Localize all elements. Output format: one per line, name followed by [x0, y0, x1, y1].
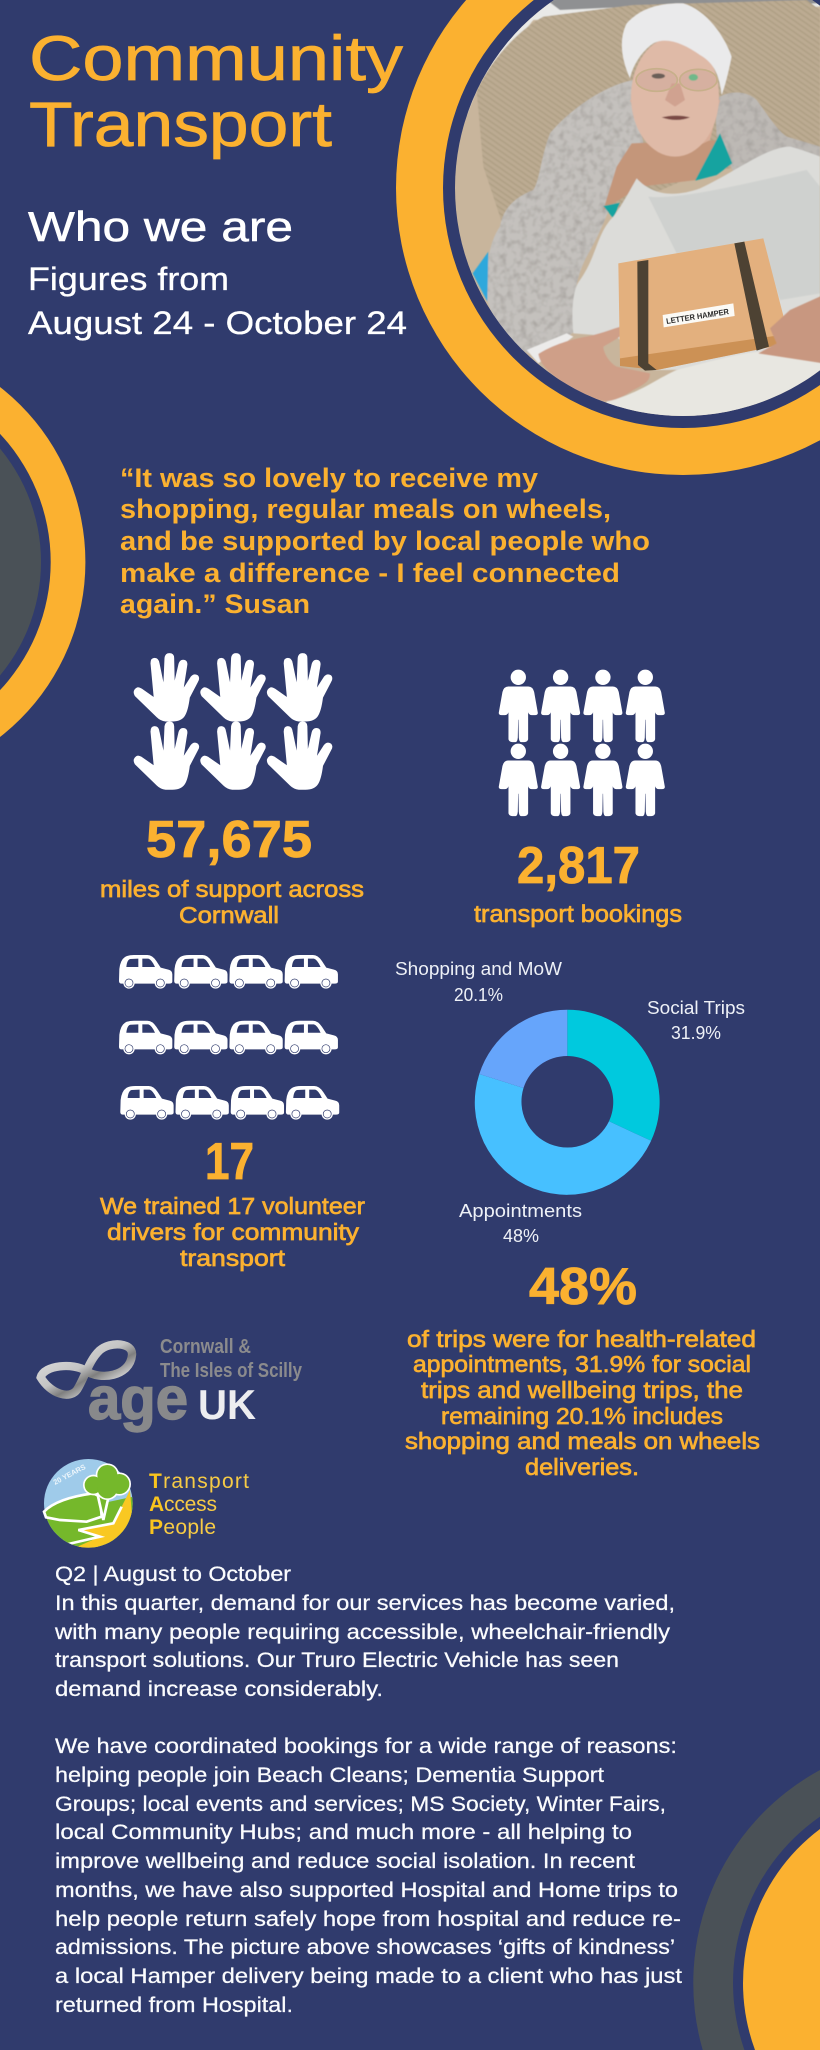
logo: Age UK Cornwall and the Isles of Scilly: UK — [198, 1381, 256, 1428]
text block: Q2 summary: We have coordinated bookings for a wide range of reasons: — [55, 1734, 677, 1758]
text block: Q2 summary: Groups; local events and services; MS Society, Winter Fairs, — [55, 1792, 666, 1816]
subtitle: who we are: Who we are — [28, 203, 293, 250]
logo: Transport Access People: 20 YEARS — [52, 1462, 87, 1487]
title — [29, 24, 404, 160]
chart label: appointments — [459, 1200, 582, 1246]
quote from Susan: again.” Susan — [120, 589, 310, 619]
logo: Transport Access People: Transport — [149, 1470, 249, 1493]
title: Transport — [29, 90, 333, 160]
quote from Susan: “It was so lovely to receive my — [120, 463, 538, 493]
quote from Susan — [120, 463, 650, 619]
text block: Q2 summary: improve wellbeing and reduce social isolation. In recent — [55, 1849, 635, 1873]
chart label: social trips — [647, 997, 745, 1043]
text block: Q2 summary — [54, 1562, 682, 2017]
stat: 48 percent: deliveries. — [525, 1454, 639, 1480]
logo: Age UK Cornwall and the Isles of Scilly: age — [88, 1365, 188, 1432]
donut chart: trip purpose — [395, 958, 745, 1246]
logo: Age UK Cornwall and the Isles of Scilly: The Isles of Scilly — [160, 1360, 303, 1382]
stat: volunteer drivers — [100, 1133, 365, 1271]
logo: Transport Access People: People — [149, 1516, 216, 1539]
decorative circle: left — [0, 340, 85, 784]
stat: volunteer drivers: 17 — [205, 1133, 254, 1191]
logo: Transport Access People — [40, 1459, 249, 1553]
icon: tree — [83, 1463, 131, 1520]
stat: volunteer drivers: We trained 17 volunteer — [100, 1193, 365, 1219]
text block: Q2 summary: In this quarter, demand for our services has become varied, — [55, 1591, 675, 1615]
text block: Q2 summary: help people return safely hope from hospital and reduce re- — [55, 1907, 681, 1931]
subtitle: who we are: August 24 - October 24 — [28, 305, 407, 341]
stat: 48 percent: 48% — [529, 1258, 637, 1316]
text block: Q2 summary: demand increase considerably. — [55, 1677, 383, 1701]
text block: Q2 summary: a local Hamper delivery being made to a client who has just — [55, 1964, 682, 1988]
icon grid: six hands — [135, 654, 332, 789]
text block: Q2 summary: helping people join Beach Cleans; Dementia Support — [55, 1763, 604, 1787]
text block: Q2 summary: admissions. The picture above showcases ‘gifts of kindness’ — [55, 1935, 675, 1959]
photo: woman holding hamper in a circular frame — [396, 0, 820, 475]
chart label: appointments: 48% — [503, 1225, 539, 1246]
stat: volunteer drivers: drivers for community — [107, 1219, 359, 1245]
text block: Q2 summary: transport solutions. Our Truro Electric Vehicle has seen — [55, 1648, 619, 1672]
text block: Q2 summary: Q2 | August to October — [55, 1562, 291, 1586]
text block: Q2 summary: with many people requiring accessible, wheelchair-friendly — [54, 1620, 670, 1644]
quote from Susan: make a difference - I feel connected — [120, 558, 620, 588]
icon grid: eight people — [499, 670, 664, 816]
title: Community — [29, 24, 404, 94]
stat: transport bookings: transport bookings — [474, 901, 682, 928]
stat: transport bookings — [474, 837, 682, 928]
text block: Q2 summary: months, we have also supported Hospital and Home trips to — [55, 1878, 678, 1902]
stat: miles of support: 57,675 — [146, 811, 312, 869]
stat: 48 percent — [405, 1258, 760, 1480]
text block: Q2 summary: returned from Hospital. — [55, 1993, 293, 2017]
logo: Transport Access People: Access — [149, 1493, 217, 1516]
stat: 48 percent: shopping and meals on wheels — [405, 1428, 760, 1454]
photo: woman holding hamper in a circular frame: LETTER HAMPER — [666, 307, 730, 326]
subtitle: who we are — [28, 203, 407, 341]
stat: miles of support: Cornwall — [179, 902, 279, 928]
chart label: appointments: Appointments — [459, 1200, 582, 1221]
stat: 48 percent: of trips were for health-related — [407, 1326, 756, 1352]
icon grid: twelve cars — [119, 955, 339, 1120]
chart label: social trips: Social Trips — [647, 997, 745, 1018]
subtitle: who we are: Figures from — [28, 261, 229, 297]
stat: transport bookings: 2,817 — [517, 837, 640, 895]
stat: 48 percent: appointments, 31.9% for social — [413, 1351, 751, 1377]
quote from Susan: and be supported by local people who — [120, 526, 650, 556]
chart label: shopping: Shopping and MoW — [395, 958, 563, 979]
quote from Susan: shopping, regular meals on wheels, — [120, 494, 611, 524]
stat: 48 percent: remaining 20.1% includes — [441, 1403, 723, 1429]
text block: Q2 summary: local Community Hubs; and much more - all helping to — [55, 1820, 632, 1844]
logo: Age UK Cornwall and the Isles of Scilly — [41, 1336, 303, 1432]
chart label: shopping — [395, 958, 563, 1005]
stat: volunteer drivers: transport — [180, 1245, 286, 1271]
stat: miles of support: miles of support across — [100, 876, 364, 902]
chart label: social trips: 31.9% — [671, 1022, 721, 1043]
logo: Age UK Cornwall and the Isles of Scilly: Cornwall & — [160, 1336, 251, 1358]
stat: 48 percent: trips and wellbeing trips, the — [421, 1377, 743, 1403]
chart label: shopping: 20.1% — [454, 984, 503, 1005]
stat: miles of support — [100, 811, 364, 928]
decorative circle: bottom right — [693, 1770, 820, 2050]
